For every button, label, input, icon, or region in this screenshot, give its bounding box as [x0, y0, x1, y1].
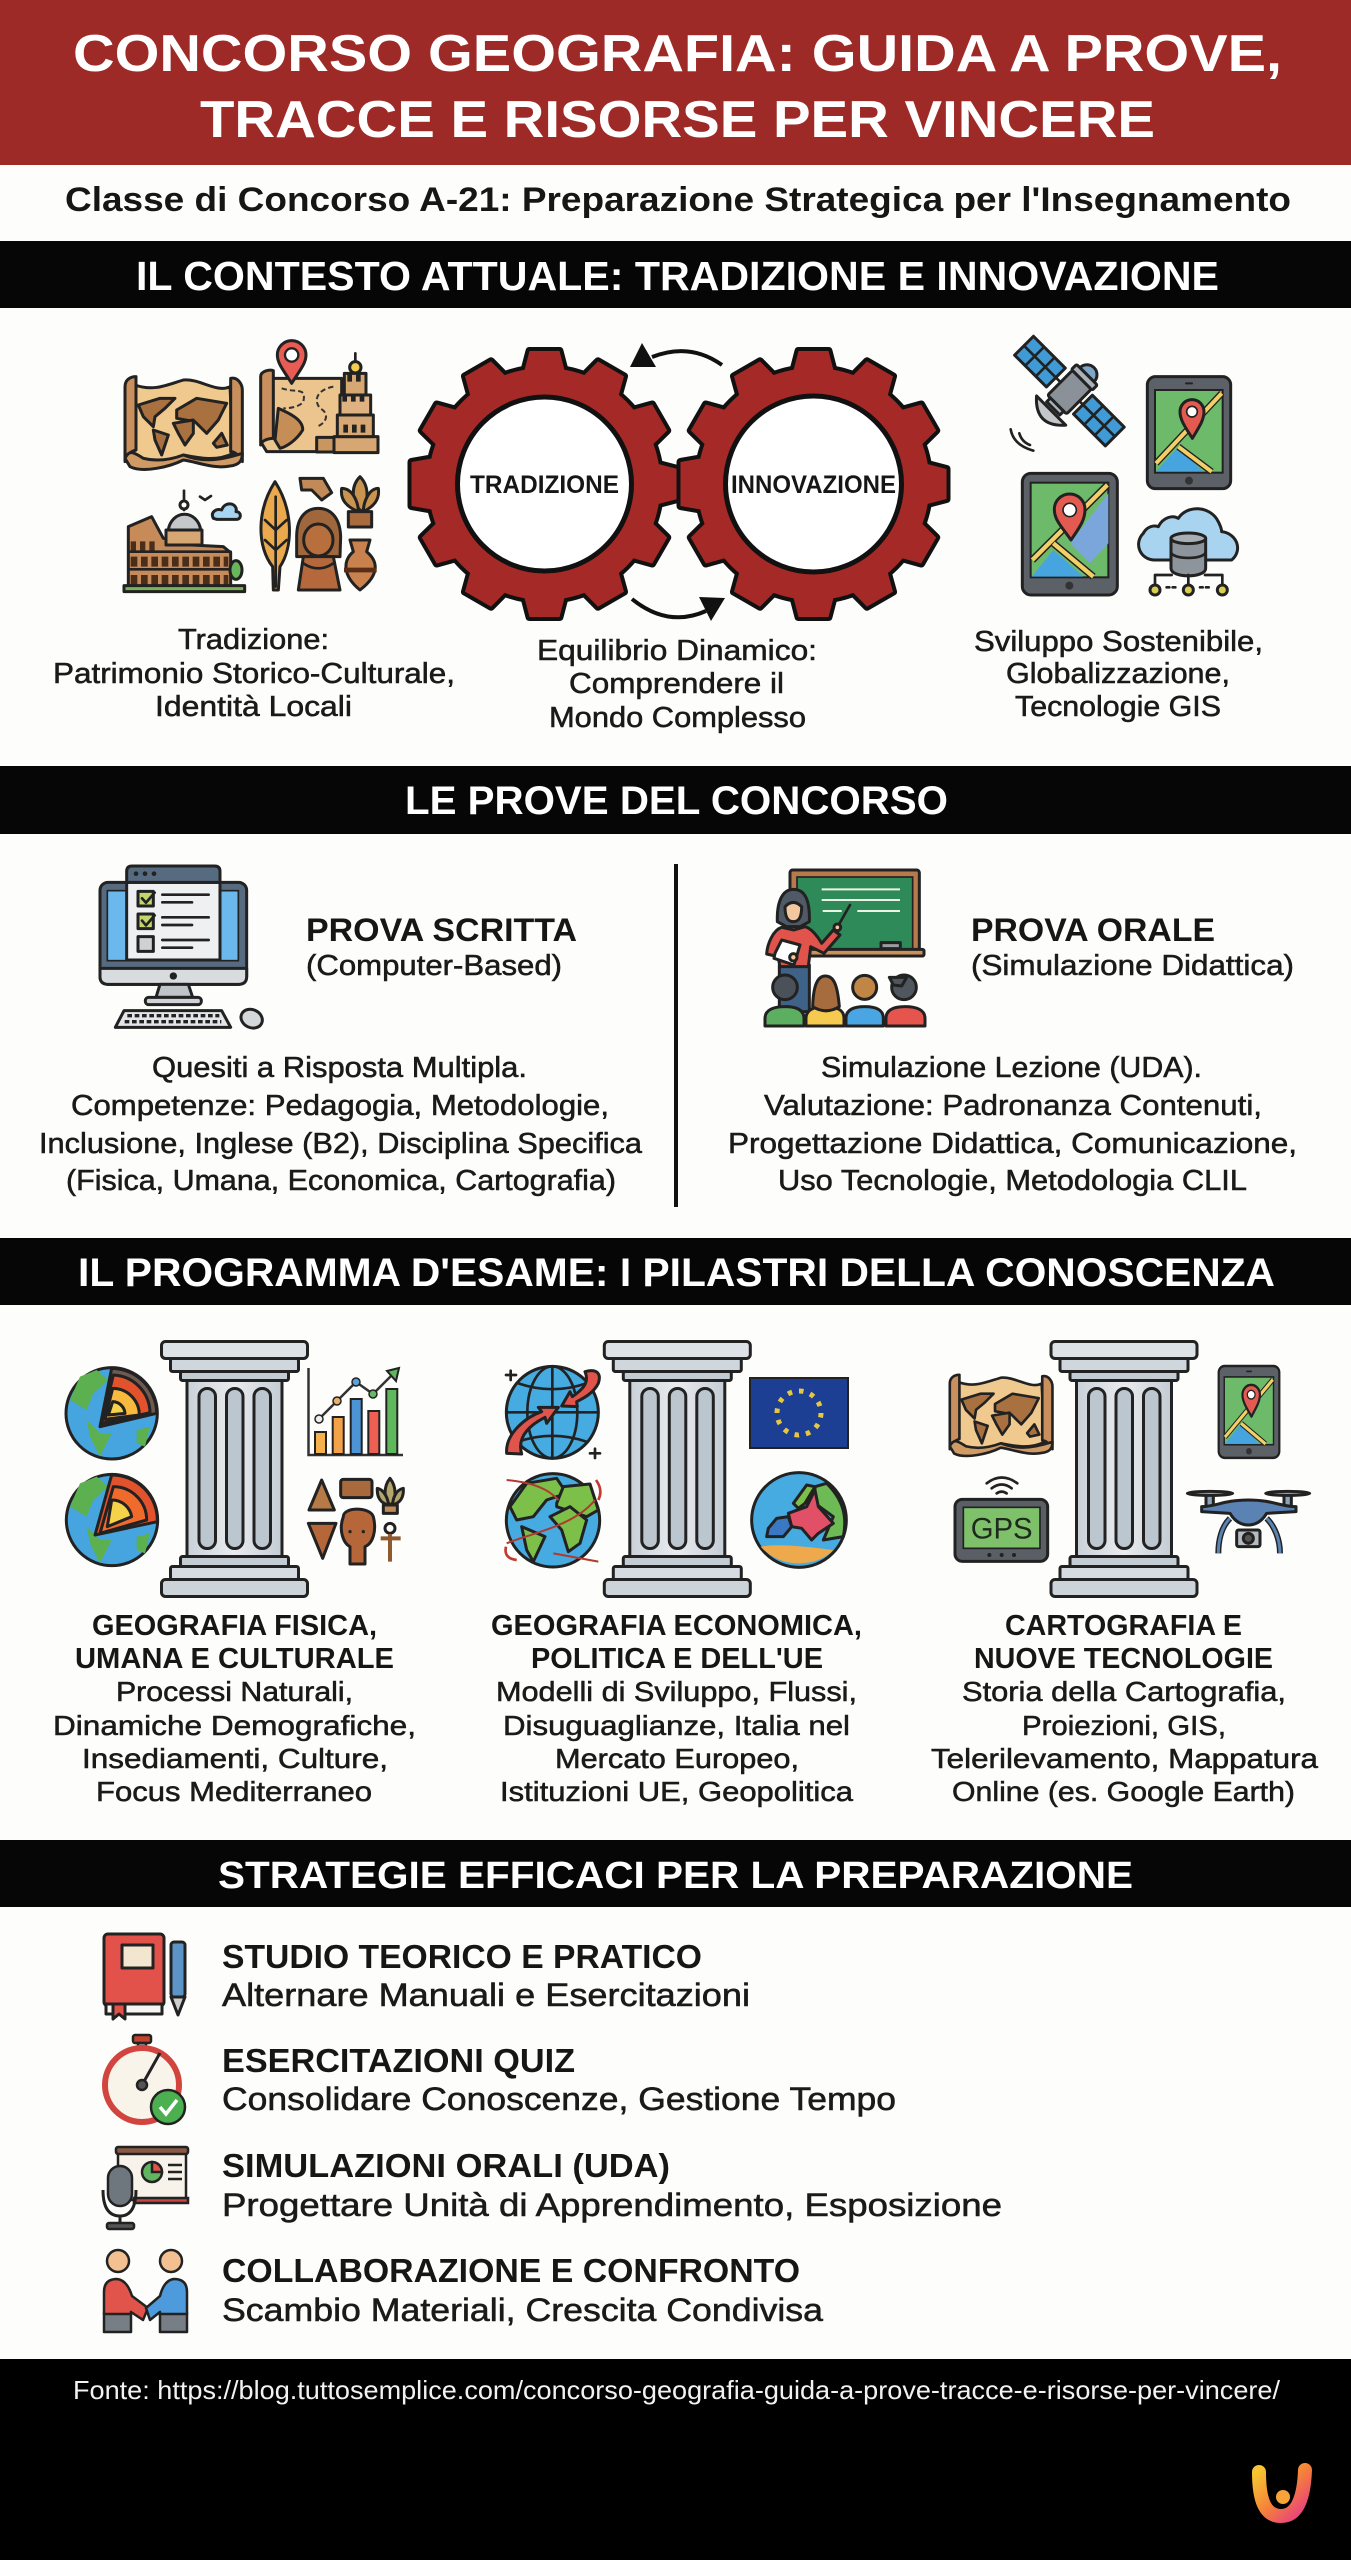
text: column 3: Storia della Cartografia, — [962, 1676, 1286, 1707]
text: column 2: POLITICA E DELL'UE — [531, 1643, 823, 1675]
text: simulazioni orali — [222, 2147, 1002, 2223]
icon: gps device — [955, 1477, 1048, 1561]
gear: tradizione — [412, 351, 678, 617]
text: studio teorico — [222, 1938, 750, 2013]
column: cartografia — [931, 1342, 1318, 1807]
text: tradizione: Tradizione: — [178, 624, 329, 656]
text: prova orale — [971, 912, 1294, 982]
text: column 1: Insediamenti, Culture, — [82, 1743, 388, 1774]
heading: contesto: IL CONTESTO ATTUALE: TRADIZIONE E INNOVAZIONE — [136, 253, 1219, 299]
text: prova orale: PROVA ORALE — [971, 912, 1215, 948]
text: esercitazioni quiz: ESERCITAZIONI QUIZ — [222, 2042, 575, 2079]
text: column 2: Modelli di Sviluppo, Flussi, — [496, 1676, 857, 1707]
column: geografia economica — [491, 1342, 862, 1807]
text: column 3: Proiezioni, GIS, — [1022, 1710, 1226, 1741]
text: descrizione prova scritta: Quesiti a Risposta Multipla. — [152, 1052, 527, 1084]
text: column 3: Online (es. Google Earth) — [952, 1776, 1295, 1807]
text: column 2: Istituzioni UE, Geopolitica — [500, 1776, 853, 1807]
title banner: TRACCE E RISORSE PER VINCERE — [200, 91, 1155, 149]
text: tradizione: Identità Locali — [155, 691, 352, 723]
bar chart — [308, 1368, 403, 1455]
gears diagram — [412, 343, 946, 621]
icon: tablet small — [1147, 377, 1231, 489]
source line: Fonte: https://blog.tuttosemplice.com/concorso-geografia-guida-a-prove-tracce-e-risorse-per-vincere/ — [73, 2375, 1281, 2405]
arrow: top — [630, 343, 722, 367]
text: innovazione: Tecnologie GIS — [1015, 691, 1221, 723]
text: esercitazioni quiz: Consolidare Conoscenze, Gestione Tempo — [222, 2081, 896, 2117]
icon: drone — [1187, 1491, 1310, 1553]
text: descrizione prova scritta: (Fisica, Umana, Economica, Cartografia) — [66, 1165, 616, 1197]
text: equilibrio dinamico: Comprendere il — [569, 668, 784, 700]
text: equilibrio dinamico: Mondo Complesso — [549, 702, 806, 734]
subtitle: Classe di Concorso A-21: Preparazione Strategica per l'Insegnamento — [65, 181, 1291, 219]
text: column 3: NUOVE TECNOLOGIE — [974, 1643, 1273, 1675]
icon: eu flag — [750, 1378, 848, 1448]
footer — [0, 2359, 1351, 2560]
heading: programma — [0, 1238, 1351, 1305]
text: tradizione: Patrimonio Storico-Culturale, — [53, 658, 455, 690]
column: geografia fisica — [53, 1342, 416, 1807]
icon: stopwatch — [105, 2035, 185, 2124]
text: descrizione prova scritta: Competenze: Pedagogia, Metodologie, — [71, 1090, 609, 1122]
icon: world globe flows — [506, 1474, 600, 1567]
text: column 2 — [491, 1610, 862, 1807]
icon: pillar 2 — [604, 1342, 750, 1596]
icon: satellite — [997, 322, 1139, 464]
text: descrizione prova scritta — [39, 1052, 643, 1197]
icon: grid globe with flows — [506, 1366, 600, 1458]
panel: programma d'esame — [0, 1238, 1351, 1807]
icon: classroom teacher — [765, 870, 925, 1026]
arrow: bottom — [632, 597, 725, 621]
text: tradizione — [53, 624, 455, 723]
heading: prove — [0, 766, 1351, 834]
text: simulazioni orali: Progettare Unità di Apprendimento, Esposizione — [222, 2187, 1002, 2223]
icon: tradition group — [124, 341, 379, 592]
text: column 1: Focus Mediterraneo — [96, 1776, 372, 1807]
text: descrizione prova orale — [728, 1052, 1297, 1197]
text: descrizione prova orale: Progettazione Didattica, Comunicazione, — [728, 1128, 1297, 1160]
text: column 2: Disuguaglianze, Italia nel — [503, 1710, 850, 1741]
gear: innovazione — [680, 351, 946, 617]
text: prova scritta: (Computer-Based) — [306, 950, 562, 982]
heading: contesto — [0, 241, 1351, 308]
text: esercitazioni quiz — [222, 2042, 896, 2117]
heading: strategie — [0, 1840, 1351, 1907]
text: descrizione prova orale: Valutazione: Padronanza Contenuti, — [764, 1090, 1262, 1122]
text: innovazione: Globalizzazione, — [1006, 658, 1230, 690]
text: prova orale: (Simulazione Didattica) — [971, 950, 1294, 982]
heading: programma: IL PROGRAMMA D'ESAME: I PILASTRI DELLA CONOSCENZA — [78, 1251, 1275, 1295]
divider — [674, 864, 678, 1207]
text: prova scritta: PROVA SCRITTA — [306, 912, 577, 948]
gear: tradizione: TRADIZIONE — [470, 471, 619, 499]
icon: collaboration people — [104, 2250, 187, 2332]
title banner: CONCORSO GEOGRAFIA: GUIDA A PROVE, — [73, 25, 1282, 83]
text: equilibrio dinamico: Equilibrio Dinamico: — [537, 635, 817, 667]
text: column 2: GEOGRAFIA ECONOMICA, — [491, 1610, 862, 1642]
text: column 1: UMANA E CULTURALE — [75, 1643, 394, 1675]
text: column 1 — [53, 1610, 416, 1807]
text: simulazioni orali: SIMULAZIONI ORALI (UDA) — [222, 2147, 670, 2184]
icon: cultural artifacts — [308, 1478, 403, 1564]
panel: contesto attuale — [0, 241, 1351, 734]
icon: pillar 3 — [1051, 1342, 1197, 1596]
panel: strategie — [0, 1840, 1351, 2332]
text: column 3: CARTOGRAFIA E — [1005, 1610, 1242, 1642]
icon: presentation and microphone — [103, 2147, 188, 2229]
text: collaborazione: COLLABORAZIONE E CONFRONTO — [222, 2252, 800, 2289]
icon: tablet large — [1022, 473, 1117, 595]
icon: cloud database — [1139, 509, 1238, 595]
text: descrizione prova orale: Simulazione Lezione (UDA). — [821, 1052, 1202, 1084]
text: prova scritta — [306, 912, 577, 982]
icon: computer quiz — [100, 866, 265, 1031]
text: studio teorico: Alternare Manuali e Esercitazioni — [222, 1977, 750, 2013]
panel: prove del concorso — [0, 766, 1351, 1207]
text: descrizione prova scritta: Inclusione, Inglese (B2), Disciplina Specifica — [39, 1128, 643, 1160]
icon: pillar 1 — [162, 1342, 308, 1596]
text: column 1: GEOGRAFIA FISICA, — [92, 1610, 377, 1642]
icon: smartphone map — [1219, 1366, 1279, 1458]
icon: earth core globes — [66, 1368, 158, 1566]
icon: gps device: GPS — [971, 1512, 1033, 1545]
heading: prove: LE PROVE DEL CONCORSO — [405, 779, 948, 823]
heading: strategie: STRATEGIE EFFICACI PER LA PREPARAZIONE — [218, 1855, 1133, 1897]
icon: innovation group — [997, 322, 1238, 595]
icon: europe globe — [752, 1473, 846, 1567]
icon: colosseum — [124, 491, 245, 592]
text: collaborazione — [222, 2252, 823, 2328]
text: innovazione — [974, 626, 1263, 723]
icon: old map — [950, 1375, 1052, 1456]
gear: innovazione: INNOVAZIONE — [731, 471, 896, 499]
text: column 3: Telerilevamento, Mappatura — [931, 1743, 1318, 1774]
text: equilibrio dinamico — [537, 635, 817, 734]
title banner — [0, 0, 1351, 165]
text: studio teorico: STUDIO TEORICO E PRATICO — [222, 1938, 702, 1975]
text: descrizione prova orale: Uso Tecnologie, Metodologia CLIL — [778, 1165, 1247, 1197]
text: column 3 — [931, 1610, 1318, 1807]
text: column 2: Mercato Europeo, — [555, 1743, 799, 1774]
text: column 1: Dinamiche Demografiche, — [53, 1710, 416, 1741]
text: innovazione: Sviluppo Sostenibile, — [974, 626, 1263, 658]
text: collaborazione: Scambio Materiali, Crescita Condivisa — [222, 2292, 823, 2328]
icon: logo — [1259, 2470, 1305, 2516]
icon: book and pen — [104, 1934, 185, 2019]
text: column 1: Processi Naturali, — [116, 1676, 353, 1707]
student heads and shoulders — [765, 975, 925, 1026]
icon: artifacts — [261, 477, 379, 590]
